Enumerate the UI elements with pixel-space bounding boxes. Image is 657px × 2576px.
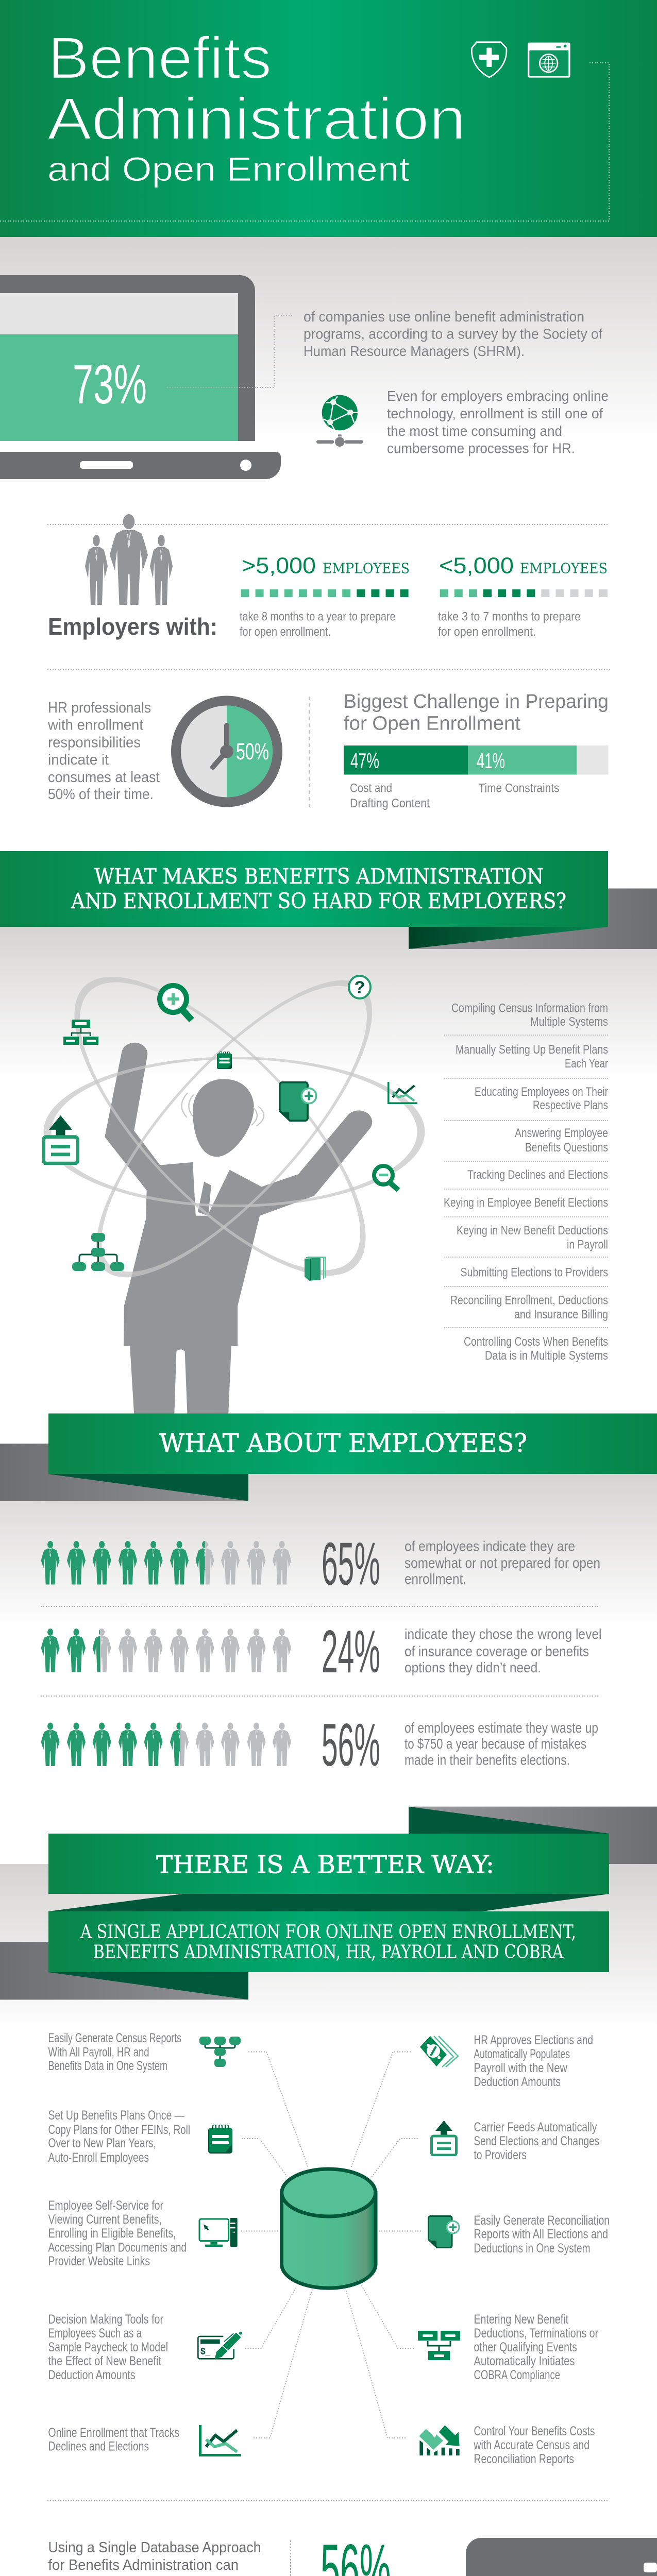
list: employer challenges (444, 1002, 608, 1363)
feature: control costs: Control Your Benefits Costs (474, 2424, 595, 2438)
feature: reconciliation reports: Deductions in One System (474, 2241, 591, 2256)
stat: 24 percent: 24% (322, 1618, 380, 1685)
feature: online enrollment tracks (48, 2425, 241, 2456)
orbit rings (31, 934, 425, 1318)
feature: COBRA compliance: Automatically Initiates (474, 2354, 575, 2368)
progress squares: 8 to 12 months (241, 589, 409, 597)
feature: employee self-service: Provider Website Links (48, 2254, 150, 2268)
list: employer challenges: and Insurance Billing (514, 1308, 608, 1321)
feature: employee self-service (48, 2198, 238, 2268)
panel: biggest challenge: Drafting Content (350, 796, 430, 810)
feature: control costs (419, 2424, 595, 2466)
feature: employee self-service: Viewing Current Benefits, (48, 2212, 162, 2227)
connectors to database (241, 2052, 421, 2438)
stacked bar chart: 41% (477, 749, 505, 773)
icon: check and pen (198, 2332, 242, 2359)
callout connector (167, 316, 294, 387)
panel: biggest challenge (344, 691, 609, 810)
heading: biggest challenge: Biggest Challenge in Preparing (344, 691, 609, 713)
stat: 65 percent: enrollment. (405, 1571, 466, 1587)
title: Administration (47, 86, 466, 152)
feature: COBRA compliance: Deductions, Terminations or (474, 2326, 598, 2341)
icon: magnifier plus (160, 986, 192, 1020)
icon: notepad (217, 1052, 232, 1069)
feature: control costs: Reconciliation Reports (474, 2452, 574, 2466)
icon: document plus (280, 1082, 316, 1121)
feature: set up plans once: Copy Plans for Other FEINs, Roll (48, 2123, 190, 2137)
icon: shield with cross (471, 42, 507, 77)
list: employer challenges: Compiling Census Information from (451, 1002, 608, 1015)
feature: COBRA compliance: Entering New Benefit (474, 2312, 568, 2327)
feature: set up plans once: Set Up Benefits Plans Once — (48, 2108, 184, 2123)
stat: more than 5000 employees: >5,000 (242, 553, 316, 578)
ribbon: there is a better way: THERE IS A BETTER WAY: (156, 1851, 494, 1879)
feature: control costs: with Accurate Census and (474, 2438, 589, 2452)
list: employer challenges: Educating Employees on Their (475, 1085, 608, 1099)
stat: fewer than 5000 employees: <5,000 (439, 553, 514, 578)
stat: fewer than 5000 employees (438, 553, 608, 639)
icon: line chart (388, 1082, 417, 1104)
feature: reconciliation reports (429, 2213, 610, 2256)
pictogram: 65 percent (41, 1541, 291, 1585)
stat: 65 percent: somewhat or not prepared for open (405, 1555, 600, 1571)
browser window with cheering employees (466, 2538, 657, 2576)
list: employer challenges: Manually Setting Up Benefit Plans (456, 1043, 608, 1057)
stat: 56 percent (322, 1711, 598, 1778)
feature: decision making tools (48, 2312, 242, 2382)
feature: decision making tools: the Effect of New Benefit (48, 2354, 161, 2368)
stat: fewer than 5000 employees: take 3 to 7 months to prepare (438, 610, 581, 623)
list: employer challenges: in Payroll (567, 1238, 608, 1252)
ribbon: what makes benefits so hard: WHAT MAKES BENEFITS ADMINISTRATION (94, 864, 544, 889)
feature: set up plans once: Over to New Plan Years, (48, 2136, 156, 2150)
icon: cost reduction (419, 2425, 460, 2455)
feature: online enrollment tracks: Declines and Elections (48, 2439, 149, 2453)
feature: HR approves elections: HR Approves Elections and (474, 2033, 593, 2047)
ribbon: there is a better way (48, 1807, 657, 1911)
stat: 56 percent: made in their benefits elections. (405, 1752, 570, 1768)
pictogram: 24 percent (41, 1629, 291, 1672)
heading: biggest challenge: for Open Enrollment (344, 713, 520, 735)
feature: decision making tools: Deduction Amounts (48, 2368, 135, 2382)
text: enrollment time consuming: cumbersome processes for HR. (387, 440, 575, 456)
text: single database approach: for Benefits Administration can (48, 2557, 239, 2573)
feature: decision making tools: Decision Making Tools for (48, 2312, 163, 2327)
text: HR professionals: consumes at least (48, 769, 160, 786)
icon: upload (43, 1115, 78, 1163)
stat: 24 percent: of insurance coverage or benefits (405, 1643, 589, 1659)
list: employer challenges: Data is in Multiple Systems (485, 1349, 608, 1363)
feature: carrier feeds: Send Elections and Changes (474, 2134, 599, 2148)
feature: decision making tools: Sample Paycheck to Model (48, 2340, 168, 2354)
feature: HR approves elections: Payroll with the New (474, 2061, 568, 2075)
text: 73 percent of companies: Human Resource Managers (SHRM). (304, 343, 525, 359)
stat: 56 percent: of employees estimate they waste up (405, 1720, 598, 1736)
clock chart: 50 percent (171, 696, 282, 807)
title (47, 25, 466, 188)
icon: money stack (420, 2036, 458, 2067)
feature: HR approves elections (420, 2033, 593, 2089)
text: 73 percent of companies: programs, according to a survey by the Society of (304, 326, 602, 342)
list: employer challenges: Reconciling Enrollment, Deductions (450, 1294, 608, 1308)
text: enrollment time consuming: the most time consuming and (387, 423, 562, 439)
stat: more than 5000 employees (240, 553, 410, 639)
database cylinder (281, 2169, 376, 2288)
stat: 56 percent: to $750 a year because of mistakes (405, 1736, 586, 1752)
list: employer challenges: Multiple Systems (530, 1015, 608, 1029)
text: HR professionals: with enrollment (47, 717, 143, 734)
feature: carrier feeds: Carrier Feeds Automatically (474, 2120, 597, 2134)
title: Benefits (48, 25, 272, 91)
stacked bar chart: 47% (350, 749, 379, 773)
laptop with 73% (0, 275, 281, 479)
stat: 56 percent: 56% (322, 1711, 380, 1778)
stat: more than 5000 employees: EMPLOYEES (323, 561, 410, 577)
stat: more than 5000 employees: take 8 months to a year to prepare (240, 610, 396, 623)
heading: biggest challenge (344, 691, 609, 735)
text: enrollment time consuming: Even for employers embracing online (387, 388, 609, 404)
text: HR professionals: indicate it (48, 752, 109, 768)
ribbon: what about employees (0, 1414, 657, 1501)
text: HR professionals (47, 700, 160, 803)
list: employer challenges: Answering Employee (515, 1126, 608, 1140)
stat: 24 percent (322, 1618, 602, 1685)
stat: 65 percent: 65% (322, 1530, 380, 1597)
feature: employee self-service: Accessing Plan Documents and (48, 2240, 187, 2255)
text: single database approach: Using a Single Database Approach (48, 2539, 261, 2556)
icon: computer (199, 2218, 238, 2247)
feature: carrier feeds (432, 2120, 599, 2162)
heading: employers with: Employers with: (48, 613, 217, 640)
icon: question mark: ? (355, 978, 365, 997)
icon: network globe (316, 395, 363, 447)
icon: three businessmen (85, 514, 173, 605)
icon: org tree (72, 1233, 124, 1271)
feature: employee self-service: Enrolling in Eligible Benefits, (48, 2226, 176, 2241)
feature: carrier feeds: to Providers (474, 2148, 527, 2162)
clock chart: 50 percent: 50% (236, 738, 269, 765)
icon: question mark (349, 976, 370, 998)
stat: fewer than 5000 employees: for open enrollment. (438, 625, 536, 639)
icon: magnifier minus (374, 1166, 398, 1190)
text: single database approach (48, 2539, 261, 2576)
feature: decision making tools: Employees Such as a (48, 2326, 142, 2341)
feature: census reports: Benefits Data in One System (48, 2059, 167, 2073)
feature: HR approves elections: Deduction Amounts (474, 2075, 561, 2089)
feature: set up plans once (48, 2108, 232, 2165)
stat: 65 percent: of employees indicate they are (405, 1538, 575, 1554)
stat: 24 percent: indicate they chose the wrong level (405, 1626, 602, 1642)
73% value: 73% (73, 353, 147, 415)
feature: reconciliation reports: Easily Generate Reconciliation (474, 2213, 610, 2228)
panel: biggest challenge: Cost and (350, 781, 392, 795)
list: employer challenges: Each Year (565, 1057, 608, 1071)
progress squares: 3 to 7 months (440, 589, 608, 597)
feature: census reports: Easily Generate Census Reports (48, 2031, 181, 2045)
stat: more than 5000 employees: for open enrollment. (240, 625, 331, 639)
list: employer challenges: Controlling Costs When Benefits (464, 1335, 608, 1349)
feature: reconciliation reports: Reports with All Elections and (474, 2227, 608, 2242)
list: employer challenges: Benefits Questions (525, 1141, 608, 1155)
illustration: stressed businessman (105, 1043, 372, 1415)
feature: COBRA compliance: other Qualifying Events (474, 2340, 577, 2354)
feature: HR approves elections: Automatically Populates (474, 2047, 570, 2061)
list: employer challenges: Keying in Employee Benefit Elections (444, 1196, 608, 1210)
text: HR professionals: HR professionals (48, 700, 151, 716)
list: employer challenges: Respective Plans (533, 1098, 608, 1112)
feature: census reports: With All Payroll, HR and (48, 2045, 149, 2060)
ribbon: a single application: BENEFITS ADMINISTRATION, HR, PAYROLL AND COBRA (93, 1942, 564, 1963)
icon: books (305, 1257, 325, 1281)
text: HR professionals: responsibilities (48, 735, 141, 751)
stat: 24 percent: options they didn’t need. (405, 1659, 541, 1675)
ribbon: what about employees: WHAT ABOUT EMPLOYEES? (159, 1428, 527, 1458)
icon: check and pen: $_ (200, 2346, 211, 2356)
text: enrollment time consuming: technology, enrollment is still one of (387, 405, 603, 421)
pictogram: 56 percent (41, 1723, 291, 1766)
stacked bar chart (344, 745, 608, 775)
feature: census reports (48, 2031, 241, 2073)
icon: browser window with globe (528, 43, 570, 78)
title: and Open Enrollment (47, 150, 410, 188)
feature: online enrollment tracks: Online Enrollment that Tracks (48, 2426, 179, 2440)
header banner (0, 0, 657, 237)
text: 73 percent of companies (304, 309, 602, 359)
ribbon: what makes benefits so hard (0, 851, 657, 949)
text: enrollment time consuming (387, 388, 609, 456)
icon: small org chart (63, 1020, 98, 1045)
ribbon: what makes benefits so hard: AND ENROLLMENT SO HARD FOR EMPLOYERS? (71, 889, 566, 913)
ribbon: a single application (0, 1911, 609, 1999)
panel: biggest challenge: Time Constraints (478, 781, 560, 795)
stat: fewer than 5000 employees: EMPLOYEES (520, 561, 608, 577)
feature: employee self-service: Employee Self-Service for (48, 2198, 163, 2213)
list: employer challenges: Keying in New Benefit Deductions (457, 1224, 608, 1238)
stat: 65 percent (322, 1530, 600, 1597)
text: HR professionals: 50% of their time. (48, 786, 154, 803)
feature: set up plans once: Auto-Enroll Employees (48, 2150, 149, 2165)
ribbon: a single application: A SINGLE APPLICATION FOR ONLINE OPEN ENROLLMENT, (80, 1922, 576, 1943)
list: employer challenges: Tracking Declines and Elections (467, 1168, 608, 1182)
feature: COBRA compliance (418, 2312, 598, 2382)
text: 73 percent of companies: of companies use online benefit administration (304, 309, 584, 325)
list: employer challenges: Submitting Elections to Providers (461, 1265, 608, 1280)
feature: COBRA compliance: COBRA Compliance (474, 2368, 560, 2382)
